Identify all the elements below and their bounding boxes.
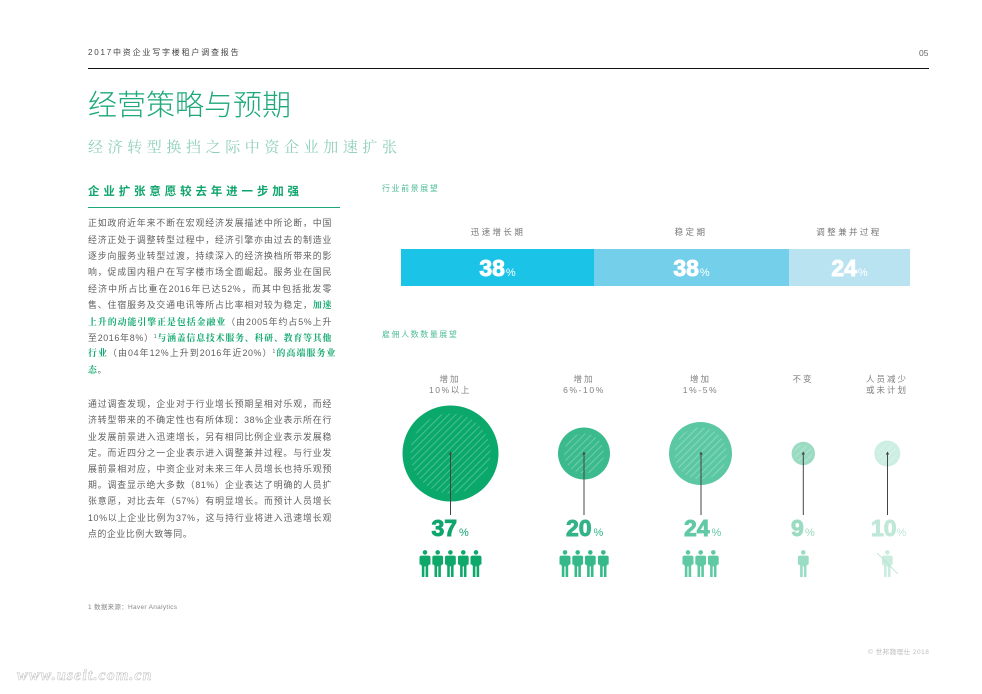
text block: paragraph two: 张意愿，对比去年（57%）有明显增长。而预计人员增长 [88,496,332,506]
bubble chart: headcount outlook [402,374,908,577]
column: unchanged: % [805,527,815,539]
text block: paragraph two: 期。调查显示绝大多数（81%）企业表达了明确的人员扩 [88,480,332,490]
text block: paragraph one: 行业（由04年12%上升到2016年近20%）1的高端服务业 [88,348,336,358]
bar labels: 迅速增长期 [471,227,525,237]
segment: 38% rapid growth [401,249,594,286]
bar labels [471,227,882,237]
title: 经营策略与预期 [88,90,291,122]
text block: paragraph one: 态。 [88,365,107,375]
column: increase 6%-10%: 增加 [573,374,595,384]
column: reduce or no plan: % [896,527,906,539]
text block: paragraph two: 展前景相对应，中资企业对未来三年人员增长也持乐观预 [88,464,332,474]
stacked bar chart [401,249,910,286]
column: increase over 10%: % [459,527,469,539]
header rule [88,68,929,69]
text block: paragraph one: 售、住宿服务及交通电讯等所占比率相对较为稳定，加速 [88,300,332,310]
column: increase 1%-5%: 24 [684,515,710,541]
column: unchanged: 9 [791,515,804,541]
column: reduce or no plan: 10 [871,515,897,541]
bar labels: 稳定期 [675,227,707,237]
segment: 24% consolidation: 24% [831,255,868,281]
text block: paragraph one: 正如政府近年来不断在宏观经济发展描述中所论断，中国 [88,218,332,228]
page number: 05 [919,48,928,58]
text block: paragraph two: 业发展前景进入迅速增长，另有相同比例企业表示发展稳 [88,432,332,442]
column: increase over 10%: 增加 [439,374,461,384]
section heading underline [88,207,340,208]
subtitle: 经济转型换挡之际中资企业加速扩张 [88,140,402,156]
text block: paragraph one: 上升的动能引擎正是包括金融业（由2005年约占5%上升 [88,317,332,327]
watermark: www.useit.com.cn [17,667,153,684]
column: increase 6%-10% [558,374,610,577]
text block: paragraph one: 经济中所占比重在2016年已达52%，而其中包括批发零 [88,284,332,294]
column: increase 1%-5%: 1%-5% [683,385,718,395]
column: increase 1%-5% [669,374,732,577]
column: reduce or no plan [866,374,908,577]
copyright: © 世邦魏理仕 2018 [868,649,929,656]
chart heading: headcount outlook: 雇佣人数数量展望 [382,330,458,339]
text block: paragraph one: 经济正处于调整转型过程中，经济引擎亦由过去的制造业 [88,235,332,245]
column: increase 1%-5%: 增加 [690,374,711,384]
text block: paragraph two: 定。而近四分之一企业表示进入调整兼并过程。与行业发 [88,448,332,458]
column: increase over 10%: 37 [432,515,457,541]
text block: paragraph two: 通过调查发现，企业对于行业增长预期呈相对乐观，而经 [88,399,332,409]
text block: paragraph two: 点的企业比例大致等同。 [88,529,192,539]
segment: 38% stable [594,249,789,286]
bar labels: 调整兼并过程 [816,227,882,237]
column: reduce or no plan: 人员减少 [866,374,908,384]
segment: 38% stable: 38% [673,255,710,281]
chart heading: industry outlook: 行业前景展望 [382,184,439,193]
text block: paragraph one: 逐步向服务业转型过渡，持续深入的经济换档所带来的影 [88,251,332,261]
column: increase over 10% [402,374,498,577]
column: increase 1%-5%: % [712,527,722,539]
column: increase over 10%: 10%以上 [429,385,471,395]
text block: paragraph two: 济转型带来的不确定性也有所体现：38%企业表示所在行 [88,415,332,425]
text block: paragraph one: 响，促成国内租户在写字楼市场全面崛起。服务业在国民 [88,267,332,277]
text block: paragraph two: 10%以上企业比例为37%，这与持行业将进入迅速增长观 [88,513,332,523]
column: increase 6%-10%: % [594,527,604,539]
text block: paragraph two [88,399,332,539]
header running title: 2017中资企业写字楼租户调查报告 [88,48,240,57]
column: increase 6%-10%: 6%-10% [563,385,605,395]
column: increase 6%-10%: 20 [566,515,592,541]
text block: paragraph one: 至2016年8%）1与涵盖信息技术服务、科研、教育等其他 [88,333,332,343]
section heading: 企业扩张意愿较去年进一步加强 [88,186,303,198]
footnote: 1 数据来源：Haver Analytics [88,604,177,611]
column: unchanged [791,374,815,577]
segment: 24% consolidation [789,249,910,286]
column: reduce or no plan: 或未计划 [866,385,908,395]
segment: 38% rapid growth: 38% [479,255,516,281]
text block: paragraph one [88,218,336,375]
column: unchanged: 不变 [792,374,814,384]
